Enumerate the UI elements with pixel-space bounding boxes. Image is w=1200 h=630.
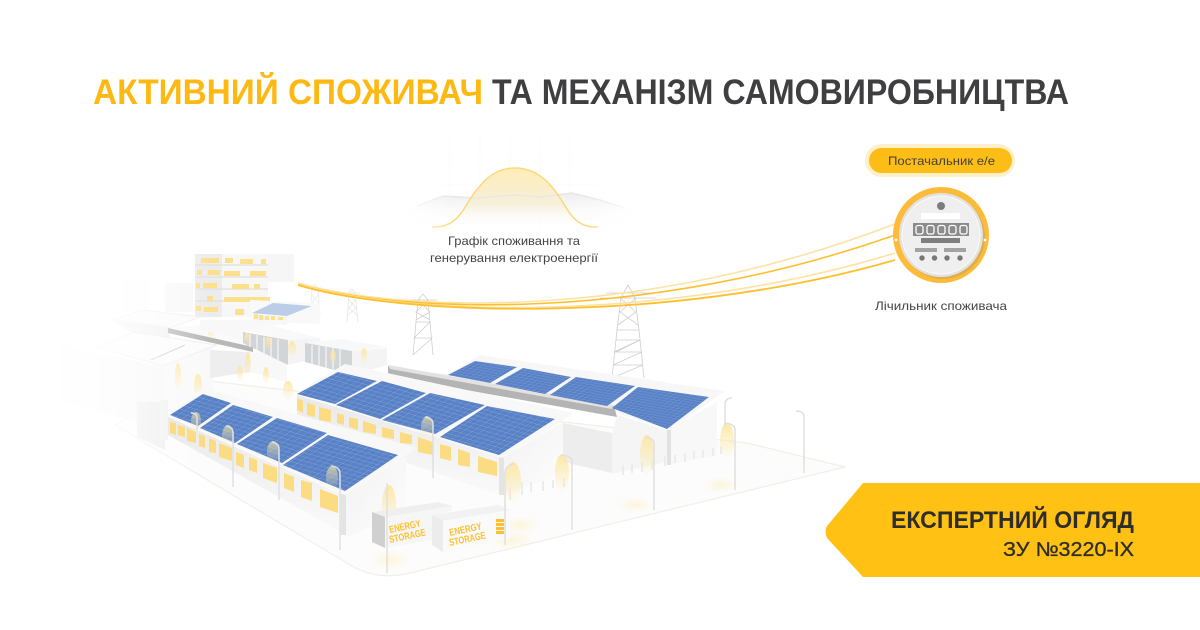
pylon small	[345, 289, 360, 322]
solar panels	[297, 372, 377, 404]
container rear: STORAGE	[388, 527, 427, 546]
windows	[170, 422, 338, 513]
chart caption	[430, 234, 599, 265]
solar panels	[448, 361, 517, 383]
background lamp glows	[175, 327, 293, 399]
meter caption: Лічильник споживача	[875, 299, 1007, 313]
icon: electricity meter	[893, 187, 989, 283]
small solar building	[250, 300, 320, 325]
container front: STORAGE	[448, 530, 487, 549]
faded left buildings	[60, 280, 293, 450]
chart caption: Графік споживання та	[448, 234, 580, 248]
pylon large	[600, 285, 656, 378]
pylon medium	[410, 294, 437, 355]
building middle with solar	[296, 364, 574, 495]
roof	[388, 355, 725, 430]
fences	[510, 446, 721, 500]
consumption area	[405, 193, 632, 228]
container rear	[372, 502, 452, 548]
chart caption: генерування електроенергії	[430, 251, 599, 265]
title accent: active consumer: АКТИВНИЙ СПОЖИВАЧ	[93, 72, 483, 112]
chart: consumption and generation	[400, 135, 640, 230]
roof	[168, 388, 417, 495]
generation line	[432, 168, 598, 227]
walls	[297, 395, 500, 495]
walls	[563, 423, 612, 473]
industrial park illustration	[0, 230, 804, 570]
pylons	[308, 284, 656, 378]
icon: battery	[496, 519, 504, 534]
expert review badge	[826, 483, 1200, 577]
expert review badge: ЕКСПЕРТНИЙ ОГЛЯД	[891, 506, 1134, 534]
background office building	[195, 254, 294, 317]
walls	[168, 417, 343, 533]
container front: ENERGY	[448, 521, 483, 539]
roof	[296, 364, 574, 458]
supplier pill: Постачальник е/е	[888, 154, 995, 168]
supplier pill	[865, 144, 1015, 177]
consumption line	[417, 193, 625, 208]
windows	[297, 398, 497, 476]
generation bell area	[430, 168, 600, 227]
pylon far	[308, 284, 322, 316]
gutter	[388, 366, 617, 417]
ground plate	[115, 380, 845, 576]
lamp glows	[191, 412, 738, 570]
title remainder: ТА МЕХАНІЗМ САМОВИРОБНИЦТВА	[492, 73, 1069, 112]
building back with solar	[388, 355, 725, 474]
street lamps	[191, 398, 804, 570]
title	[93, 72, 1069, 112]
expert review badge: ЗУ №3220-IX	[1003, 539, 1134, 561]
power lines to meter	[298, 224, 895, 309]
front lamps over containers	[387, 464, 514, 573]
container front	[432, 505, 511, 552]
solar panels	[170, 394, 231, 426]
energy storage containers	[372, 502, 511, 552]
background container rows	[200, 320, 387, 375]
building front with solar	[168, 388, 417, 536]
container rear: ENERGY	[388, 518, 422, 536]
